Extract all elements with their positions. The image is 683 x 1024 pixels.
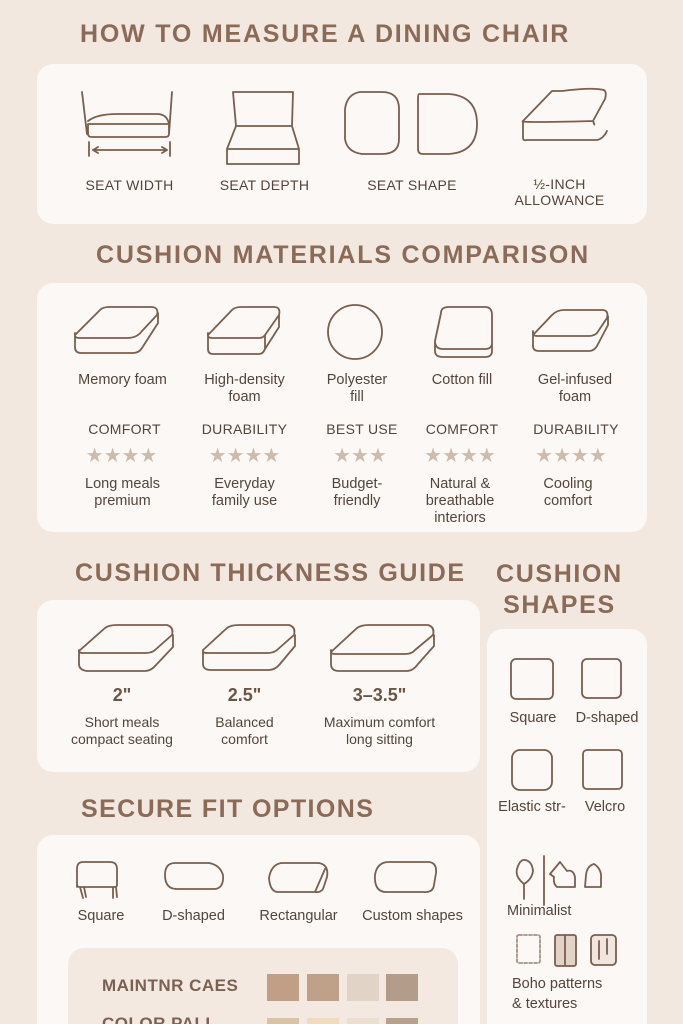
panel: materials: Cotton fill [432,372,492,388]
title: thickness: CUSHION THICKNESS GUIDE [75,559,466,587]
panel: materials: BEST USE [326,421,398,437]
panel: materials: comfort [544,493,592,509]
icons: thickness cushions [78,624,435,672]
text: 2.5 inch: comfort [221,731,268,747]
panel: materials: fill [350,389,364,405]
panel: secure fit: D-shaped [162,908,225,924]
panel: materials: Everyday [214,476,275,492]
icons: shape squares [510,658,623,791]
swatches row 1 [267,974,418,1001]
icon: high density foam [206,306,280,355]
text: shape labels: Square [510,710,556,726]
icons: fit shapes [76,861,437,899]
panel: materials: Gel-infused [538,372,612,388]
text: material names: Memory foam [78,372,167,388]
panel: materials: High-density [204,372,285,388]
text: 2 inch: 2" [113,685,131,705]
icon: seat width [81,91,173,157]
icon: allowance [522,88,608,142]
text: allowance: ½-INCH [533,176,586,192]
text: uses [85,476,160,509]
panel: shapes: D-shaped [576,710,638,726]
icon: seat shape [344,91,478,155]
title: shapes [496,560,623,619]
icon: seat depth [226,91,300,165]
panel: materials: ★★★ [333,445,387,467]
panel: materials: ★★★★ [209,445,280,467]
panel: materials: Natural & [430,476,490,492]
text: 3-3.5 inch: Maximum comfort [324,714,435,730]
text: allowance [514,176,605,208]
title: secure fit: SECURE FIT OPTIONS [81,795,374,823]
text: 2 inch [71,685,173,747]
panel: shapes [487,629,647,1024]
panel: materials: family use [212,493,277,509]
text: allowance: ALLOWANCE [514,192,605,208]
text: seat shape: SEAT SHAPE [367,177,457,193]
icon: memory foam [74,306,159,354]
inner panel: maintenance swatches [68,948,458,1024]
icon: gel foam [532,309,609,352]
text: seat depth: SEAT DEPTH [220,177,309,193]
text: boho: Boho patterns [512,976,602,992]
swatches row 2 [267,1018,418,1024]
text: boho: & textures [512,996,577,1012]
title: how to measure: HOW TO MEASURE A DINING CHAIR [80,20,570,48]
panel: materials: ★★★★ [535,445,607,467]
text: boho [512,976,602,1012]
text: categories: COMFORT [88,421,161,437]
panel: measure [37,64,647,224]
panel: materials: foam [559,389,591,405]
text: 3-3.5 inch [324,685,436,747]
icon: cotton [434,306,493,358]
panel: materials: Cooling [543,476,593,492]
text: 2 inch: compact seating [71,731,173,747]
text: 2 inch: Short meals [85,714,159,730]
panel: materials: foam [228,389,261,405]
panel: secure fit: Rectangular [259,908,338,924]
panel: materials [37,283,647,532]
panel: thickness [37,600,480,772]
panel: materials: Budget- [332,476,382,492]
text: 2.5 inch [215,685,274,747]
icon: boho [516,934,617,967]
panel: materials: DURABILITY [533,421,619,437]
title: shapes: CUSHION [496,560,623,588]
text: 3-3.5 inch: 3–3.5" [353,685,406,705]
text: uses: Long meals [85,476,160,492]
panel: materials: breathable [426,493,494,509]
text: 2.5 inch: 2.5" [228,685,261,705]
text: minimalist: Minimalist [507,903,571,919]
panel: materials: ★★★★ [424,445,496,467]
panel: materials: Polyester [327,372,387,388]
text: 2.5 inch: Balanced [215,714,274,730]
icon: minimalist [516,855,602,906]
text: 3-3.5 inch: long sitting [346,731,413,747]
text: fit labels: Square [78,908,124,924]
text: maintenance: MAINTNR CAES [102,976,238,995]
panel: materials: DURABILITY [202,421,287,437]
title: materials: CUSHION MATERIALS COMPARISON [96,241,590,269]
panel: shapes: Elastic str- [498,799,566,815]
title: shapes: SHAPES [503,591,616,619]
text: seat width: SEAT WIDTH [85,177,174,193]
panel: materials: friendly [334,493,380,509]
icon: polyester [327,304,383,360]
rating stars: ★★★★ [86,445,157,467]
panel: materials: interiors [434,510,486,526]
panel: secure fit: Custom shapes [362,908,463,924]
panel: shapes: Velcro [585,799,625,815]
panel: materials: COMFORT [426,421,498,437]
text: uses: premium [94,493,151,509]
panel: secure fit [37,835,480,1024]
